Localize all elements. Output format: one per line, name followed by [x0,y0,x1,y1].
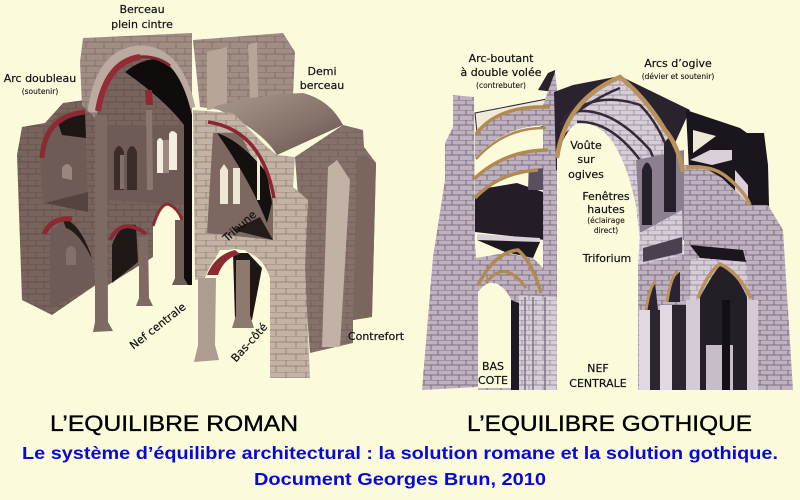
label: Arcs d'ogive [642,57,714,81]
label: NEF CENTRALE [569,362,627,390]
main pointed arch rib [557,77,683,172]
half barrel vault [213,93,343,155]
right buttress block [686,110,770,262]
label: BAS COTE: COTE [478,374,508,387]
label: NEF CENTRALE: NEF [587,362,609,375]
central cream opening [557,123,639,390]
label: Arcs d'ogive: (dévier et soutenir) [642,72,714,81]
left flying buttress bands [475,98,552,198]
crown wall around main arch [80,33,192,120]
illustration: Romanesque church cross-section [4,3,405,378]
label: Arc doubleau [4,72,76,96]
label: Demi berceau [300,65,344,92]
label: Demi berceau: Demi [307,65,337,78]
label: Arc doubleau: (soutenir) [22,87,58,96]
caption: Document Georges Brun, 2010 [254,469,546,489]
central vault [554,76,690,390]
side wall of right aisle with buttresses [295,125,376,353]
label: Fenêtres hautes: direct) [594,226,618,235]
label: Triforium: Triforium [582,252,631,265]
nave back wall seen through main arch [97,56,192,335]
label: Fenêtres hautes: (éclairage [587,216,625,225]
light front wall of right aisle [193,110,310,378]
tribune opening [207,133,273,240]
label: Arc-boutant à double volée: (contrebuter) [476,81,526,90]
bright window [157,131,177,173]
label: Voûte sur ogives [568,139,604,181]
lower arches [153,204,182,285]
label: Arc-boutant à double volée [460,52,542,90]
label: Berceau plein cintre [111,3,173,31]
label: Arcs d'ogive: Arcs d’ogive [644,57,712,70]
upper right gable with buttresses [193,33,295,110]
left structure behind buttresses [475,70,555,258]
right ribs: ogives [646,167,751,310]
label: Arc doubleau: Arc doubleau [4,72,76,85]
right outer pier and bays [638,165,793,390]
left ribs: arc-boutant [474,107,550,293]
caption: Le système d’équilibre architectural : la solution romane et la solution gothique. [22,443,778,463]
vault ribs [560,88,675,200]
label: Fenêtres hautes [582,190,630,235]
label: Berceau plein cintre: plein cintre [111,18,173,31]
label: Fenêtres hautes: hautes [587,203,625,216]
label: Voûte sur ogives: Voûte [570,139,602,152]
label: Nef centrale: Nef centrale [127,300,189,352]
nave columns [93,110,188,332]
label: Bas-côté: Bas-côté [229,320,270,365]
left pier and lower bay [476,72,557,390]
label: Fenêtres hautes: Fenêtres [582,190,630,203]
label: Tribune: Tribune [220,208,259,245]
label: Berceau plein cintre: Berceau [119,3,165,16]
left tower [422,95,478,390]
heading: L'équilibre roman: L’EQUILIBRE ROMAN [50,411,298,436]
label: NEF CENTRALE: CENTRALE [569,377,627,390]
label: BAS COTE [478,360,508,387]
twin windows [114,146,137,190]
label: BAS COTE: BAS [482,360,504,373]
dark vault crescent [125,59,192,285]
label: Contrefort: Contrefort [348,330,405,343]
clerestory and triforium [636,138,684,265]
illustration: Gothic church cross-section [422,52,793,390]
heading: L'équilibre gothique: L’EQUILIBRE GOTHIQUE [467,411,752,436]
left aisle wall [17,100,100,315]
label: Demi berceau: berceau [300,79,344,92]
label: Arc-boutant à double volée: Arc-boutant [469,52,534,65]
label: Arc-boutant à double volée: à double volée [460,66,542,79]
caption [22,443,778,489]
label: Voûte sur ogives: sur [577,153,595,166]
label: Voûte sur ogives: ogives [568,168,604,181]
lower arch opening [205,249,270,345]
front columns [194,260,254,362]
